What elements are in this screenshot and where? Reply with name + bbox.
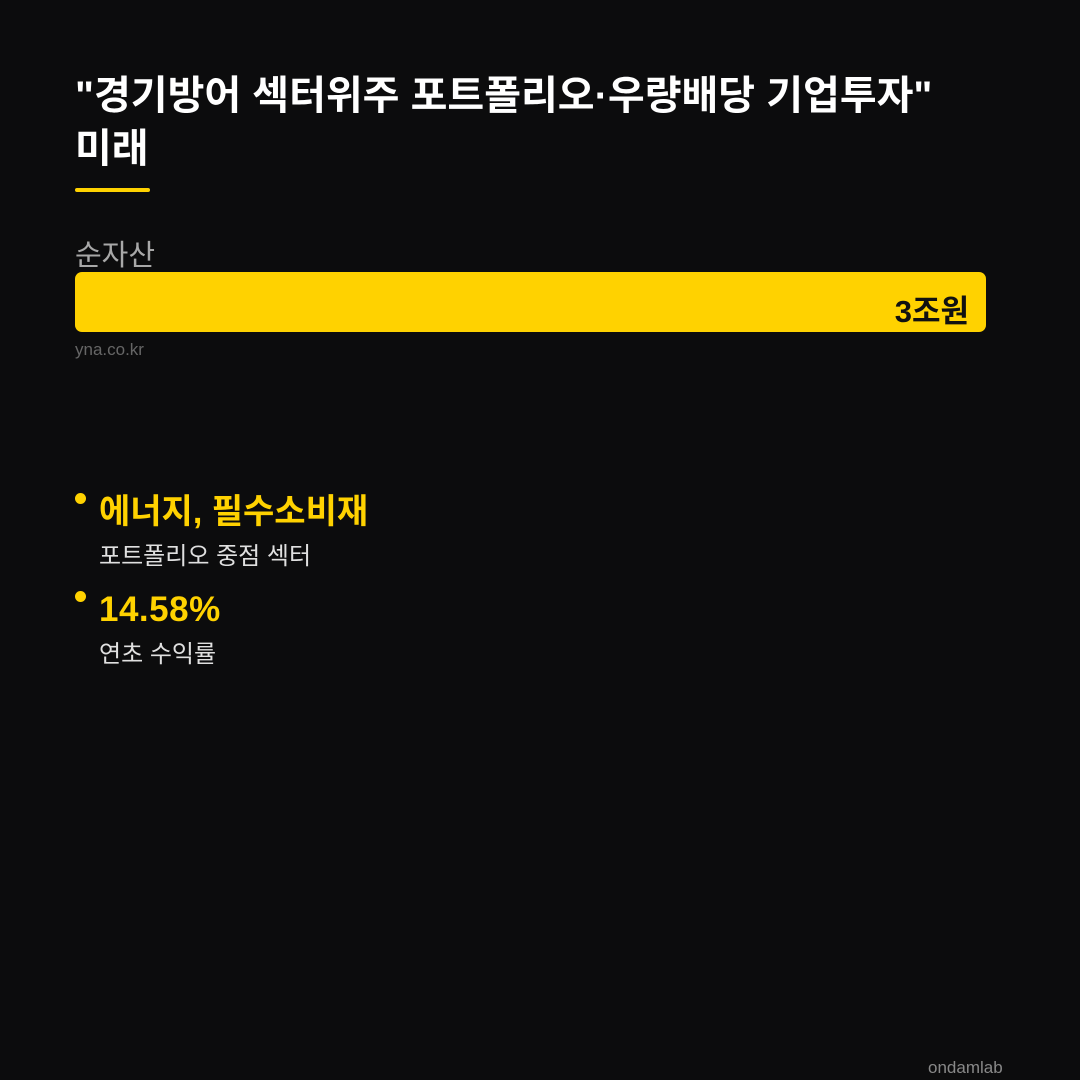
bar label: 순자산 [75, 240, 155, 272]
bullet 2: 14.58% [99, 590, 221, 629]
bullet 2 [75, 590, 221, 668]
bullet 1 [75, 493, 368, 570]
title: 미래 [75, 127, 149, 171]
title underline [75, 188, 150, 192]
source: yna.co.kr [75, 340, 144, 359]
bar value: 3조원 [895, 294, 969, 329]
title [75, 74, 932, 171]
footer credit: ondamlab [928, 1058, 1003, 1077]
bullet 1: 에너지, 필수소비재 [99, 493, 368, 531]
bullet 1: 포트폴리오 중점 섹터 [99, 543, 311, 570]
bar: net assets [75, 272, 986, 332]
bullet 2: 연초 수익률 [99, 641, 216, 668]
title: "경기방어 섹터위주 포트폴리오·우량배당 기업투자" [75, 74, 932, 118]
